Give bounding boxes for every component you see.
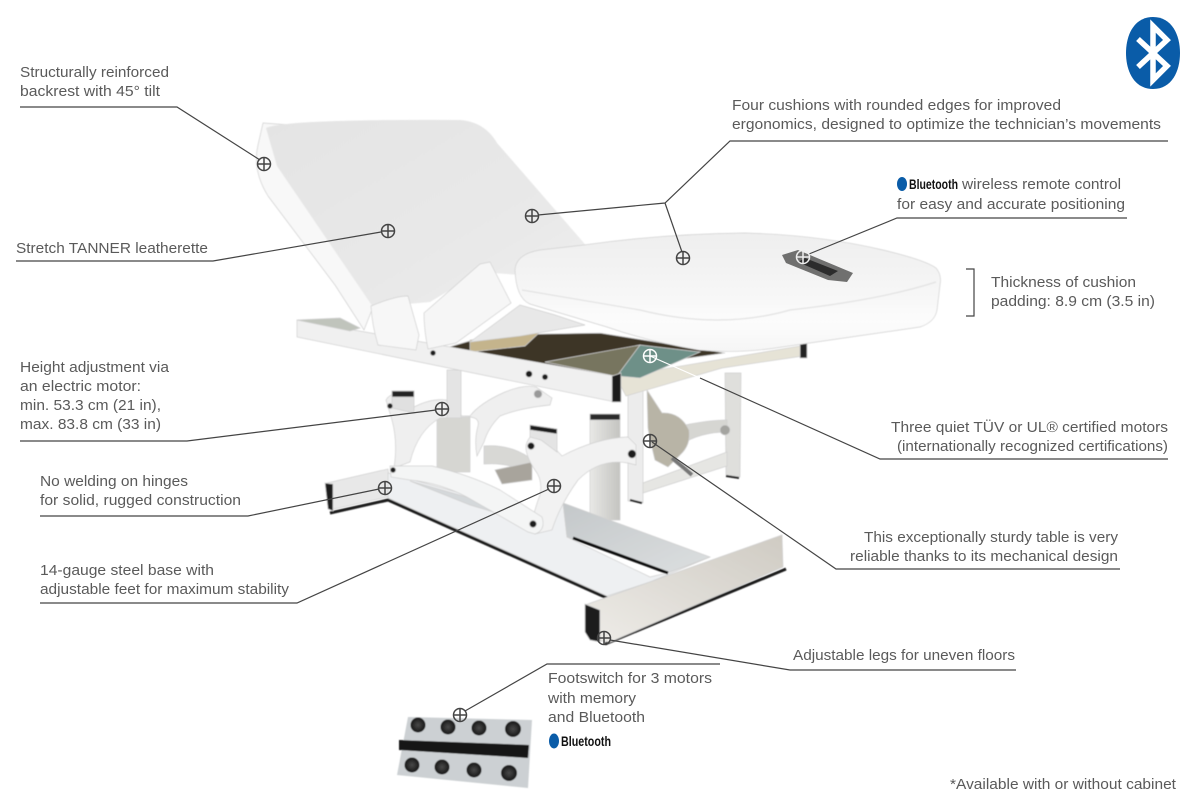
label: steel base: adjustable feet for maximum stability [40, 581, 290, 598]
label: height adjustment: max. 83.8 cm (33 in) [20, 416, 161, 433]
hinge bolts [527, 442, 535, 450]
label: hinges: No welding on hinges [40, 473, 188, 490]
black bar [399, 740, 529, 758]
label: cushions: Four cushions with rounded edges for improved [732, 97, 1061, 114]
mechanism cavity [432, 333, 725, 376]
footnote: *Available with or without cabinet [950, 776, 1177, 793]
base long beam [388, 473, 710, 596]
cross tube [484, 446, 530, 474]
label: height adjustment: min. 53.3 cm (21 in), [20, 397, 161, 414]
front arm [526, 434, 636, 534]
label: steel base: 14-gauge steel base with [40, 562, 214, 579]
leader lines [16, 107, 1168, 711]
label: remote control: for easy and accurate positioning [897, 196, 1125, 213]
label: footswitch [547, 670, 712, 749]
upper post [447, 370, 461, 418]
motor [647, 390, 689, 467]
knobs [410, 718, 426, 732]
lower beam [390, 466, 543, 534]
footswitch [397, 717, 532, 788]
label: backrest: backrest with 45° tilt [20, 83, 161, 100]
label: hinges: for solid, rugged construction [40, 492, 241, 509]
treatment table illustration [256, 120, 940, 644]
callout markers [258, 158, 810, 722]
seat cushion [515, 233, 940, 351]
label: footswitch: and Bluetooth [548, 709, 645, 726]
remote control [782, 250, 853, 282]
plate [397, 717, 532, 788]
label: adjustable legs: Adjustable legs for uneven floors [793, 647, 1015, 664]
label: footswitch: Bluetooth [561, 733, 611, 749]
right arm [680, 420, 727, 445]
label: motors: Three quiet TÜV or UL® certified motors [891, 418, 1168, 436]
label: cushions: ergonomics, designed to optimize the technician’s movements [732, 116, 1161, 133]
label: remote control [897, 176, 1125, 213]
label: remote control: wireless remote control [961, 176, 1121, 193]
label: sturdy design: reliable thanks to its mechanical design [850, 548, 1118, 565]
frame bolts [526, 371, 532, 377]
table frame front [297, 320, 615, 402]
base inner panel [563, 503, 710, 573]
label: height adjustment: an electric motor: [20, 378, 141, 395]
base shadow [330, 500, 607, 598]
label: motors: (internationally recognized certifications) [897, 438, 1168, 455]
middle right cushion [424, 262, 511, 349]
label: height adjustment: Height adjustment via [20, 359, 170, 376]
middle left cushion [371, 296, 419, 350]
table frame right [616, 345, 806, 396]
label: cushion thickness: padding: 8.9 cm (3.5 in) [991, 293, 1155, 310]
rear arm top block [392, 391, 414, 413]
label: cushion thickness: Thickness of cushion [991, 274, 1136, 291]
H-base left foot [327, 469, 392, 510]
right leg frame [628, 390, 643, 503]
icon: Bluetooth logo [1126, 17, 1180, 89]
label: remote control: Bluetooth [909, 176, 958, 192]
label: sturdy design: This exceptionally sturdy table is very [864, 529, 1119, 546]
label: leatherette: Stretch TANNER leatherette [16, 240, 208, 257]
backrest cushion face [266, 120, 590, 307]
base right foot bar [585, 535, 783, 642]
rear arm [386, 386, 552, 468]
backrest cushion side [256, 123, 373, 330]
rear column [437, 417, 470, 472]
label: footswitch: with memory [547, 690, 637, 707]
label: footswitch: Footswitch for 3 motors [548, 670, 712, 687]
central column [590, 415, 620, 520]
label: backrest: Structurally reinforced [20, 64, 169, 81]
